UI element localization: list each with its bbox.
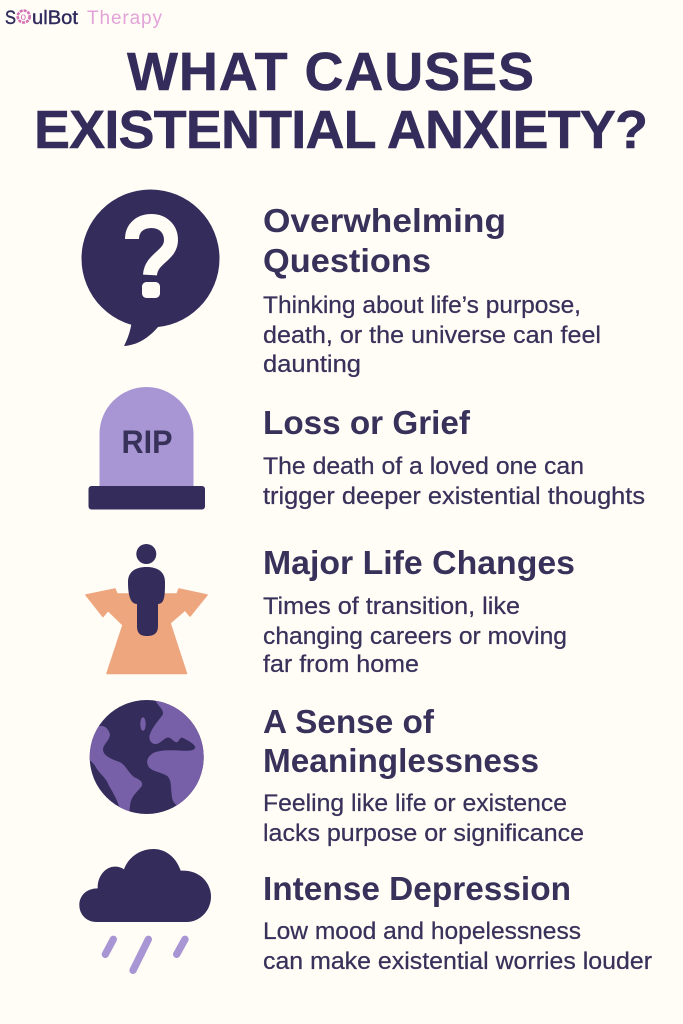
icon: person at crossroads bbox=[86, 544, 207, 674]
section: a sense of meaninglessness bbox=[263, 703, 584, 847]
section: a sense of meaninglessness: Feeling like life or existence bbox=[263, 790, 567, 817]
logo: SoulBot Therapy: S bbox=[5, 8, 16, 29]
section: a sense of meaninglessness: Meaninglessness bbox=[263, 742, 539, 779]
section: a sense of meaninglessness: A Sense of bbox=[263, 703, 435, 740]
icon: rain cloud bbox=[79, 849, 211, 970]
logo: SoulBot Therapy: Therapy bbox=[87, 8, 162, 29]
section: loss or grief: Loss or Grief bbox=[263, 404, 471, 441]
title bbox=[34, 42, 648, 160]
section: intense depression: Low mood and hopelessness bbox=[263, 918, 581, 945]
section: major life changes: far from home bbox=[263, 651, 419, 678]
section: overwhelming questions: death, or the universe can feel bbox=[263, 322, 601, 349]
section: a sense of meaninglessness: lacks purpose or significance bbox=[263, 820, 584, 847]
icon: globe bbox=[88, 698, 210, 814]
section: intense depression: Intense Depression bbox=[263, 870, 571, 907]
icon: RIP gravestone bbox=[88, 387, 205, 510]
title: EXISTENTIAL ANXIETY? bbox=[34, 100, 648, 160]
logo: SoulBot Therapy bbox=[5, 8, 162, 29]
logo: SoulBot Therapy: o bbox=[20, 12, 26, 23]
section: overwhelming questions: daunting bbox=[263, 351, 361, 378]
section: intense depression: can make existential worries louder bbox=[263, 948, 652, 975]
logo: SoulBot Therapy: ulBot bbox=[32, 8, 79, 29]
title: WHAT CAUSES bbox=[127, 42, 534, 102]
section: major life changes: Times of transition, like bbox=[263, 593, 520, 620]
section: overwhelming questions: Overwhelming bbox=[263, 202, 506, 239]
section: loss or grief: The death of a loved one can bbox=[263, 453, 584, 480]
section: overwhelming questions bbox=[263, 202, 601, 378]
section: major life changes bbox=[263, 544, 575, 678]
icon: RIP gravestone: RIP bbox=[122, 424, 172, 460]
section: loss or grief: trigger deeper existential thoughts bbox=[263, 483, 645, 510]
icon: question speech bubble bbox=[82, 190, 220, 346]
section: overwhelming questions: Thinking about life’s purpose, bbox=[263, 292, 581, 319]
section: intense depression bbox=[263, 870, 652, 975]
section: loss or grief bbox=[263, 404, 645, 510]
section: major life changes: Major Life Changes bbox=[263, 544, 575, 581]
section: major life changes: changing careers or moving bbox=[263, 623, 567, 650]
section: overwhelming questions: Questions bbox=[263, 242, 431, 279]
